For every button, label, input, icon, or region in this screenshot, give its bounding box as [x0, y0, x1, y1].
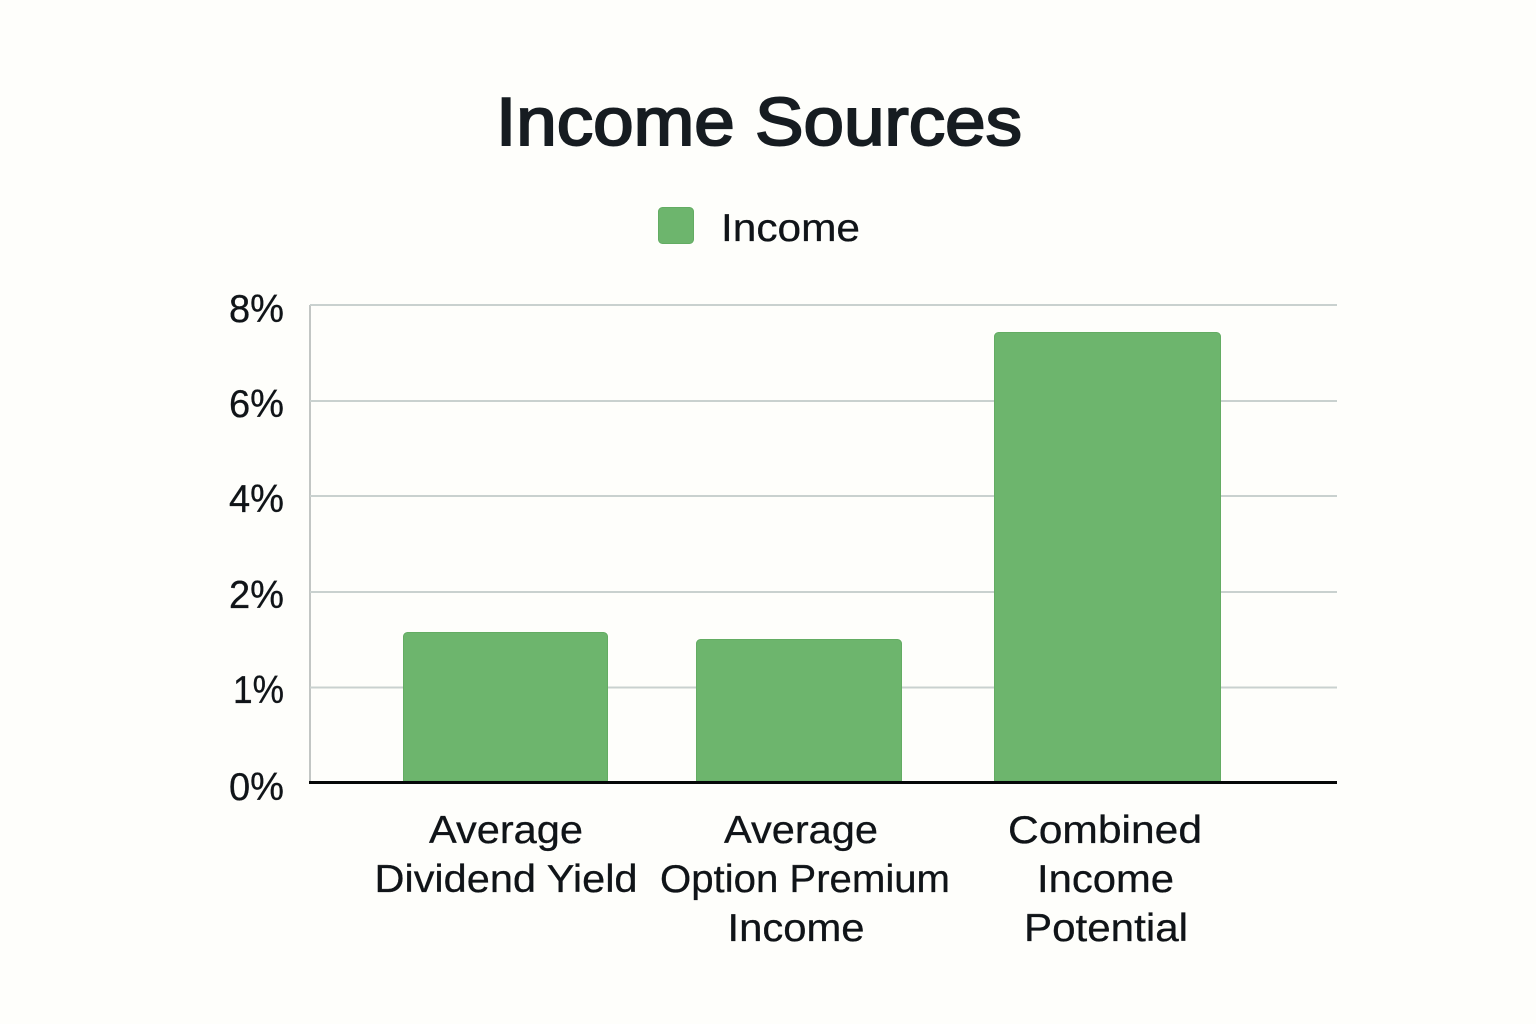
- bar: average dividend yield: [404, 632, 608, 781]
- y axis labels: 2%: [229, 574, 284, 617]
- category label: combined income potential: [1008, 809, 1202, 950]
- category label: average option premium income: Average: [724, 809, 878, 852]
- y axis labels: 4%: [229, 478, 284, 521]
- category label: average option premium income: Option Premium: [660, 858, 950, 901]
- category label: combined income potential: Combined: [1008, 809, 1202, 852]
- category label: average dividend yield: [374, 809, 638, 901]
- y axis labels: 6%: [229, 383, 284, 426]
- y axis labels: 1%: [233, 669, 284, 712]
- legend label: Income: [721, 207, 860, 250]
- y axis labels: [229, 288, 284, 809]
- category label: average dividend yield: Average: [429, 809, 583, 852]
- bar: average option premium income: [696, 640, 902, 781]
- bar chart: [229, 288, 1337, 950]
- category label: average option premium income: [660, 809, 950, 950]
- category label: average option premium income: Income: [728, 907, 864, 950]
- category label: combined income potential: Potential: [1024, 907, 1188, 950]
- legend swatch: [658, 208, 694, 244]
- y axis labels: 0%: [229, 766, 284, 809]
- title: Income Sources: [496, 84, 1022, 160]
- legend: [658, 207, 860, 250]
- y axis labels: 8%: [229, 288, 284, 331]
- category label: combined income potential: Income: [1037, 858, 1174, 901]
- category label: average dividend yield: Dividend Yield: [374, 858, 638, 901]
- bar: combined income potential: [994, 332, 1220, 781]
